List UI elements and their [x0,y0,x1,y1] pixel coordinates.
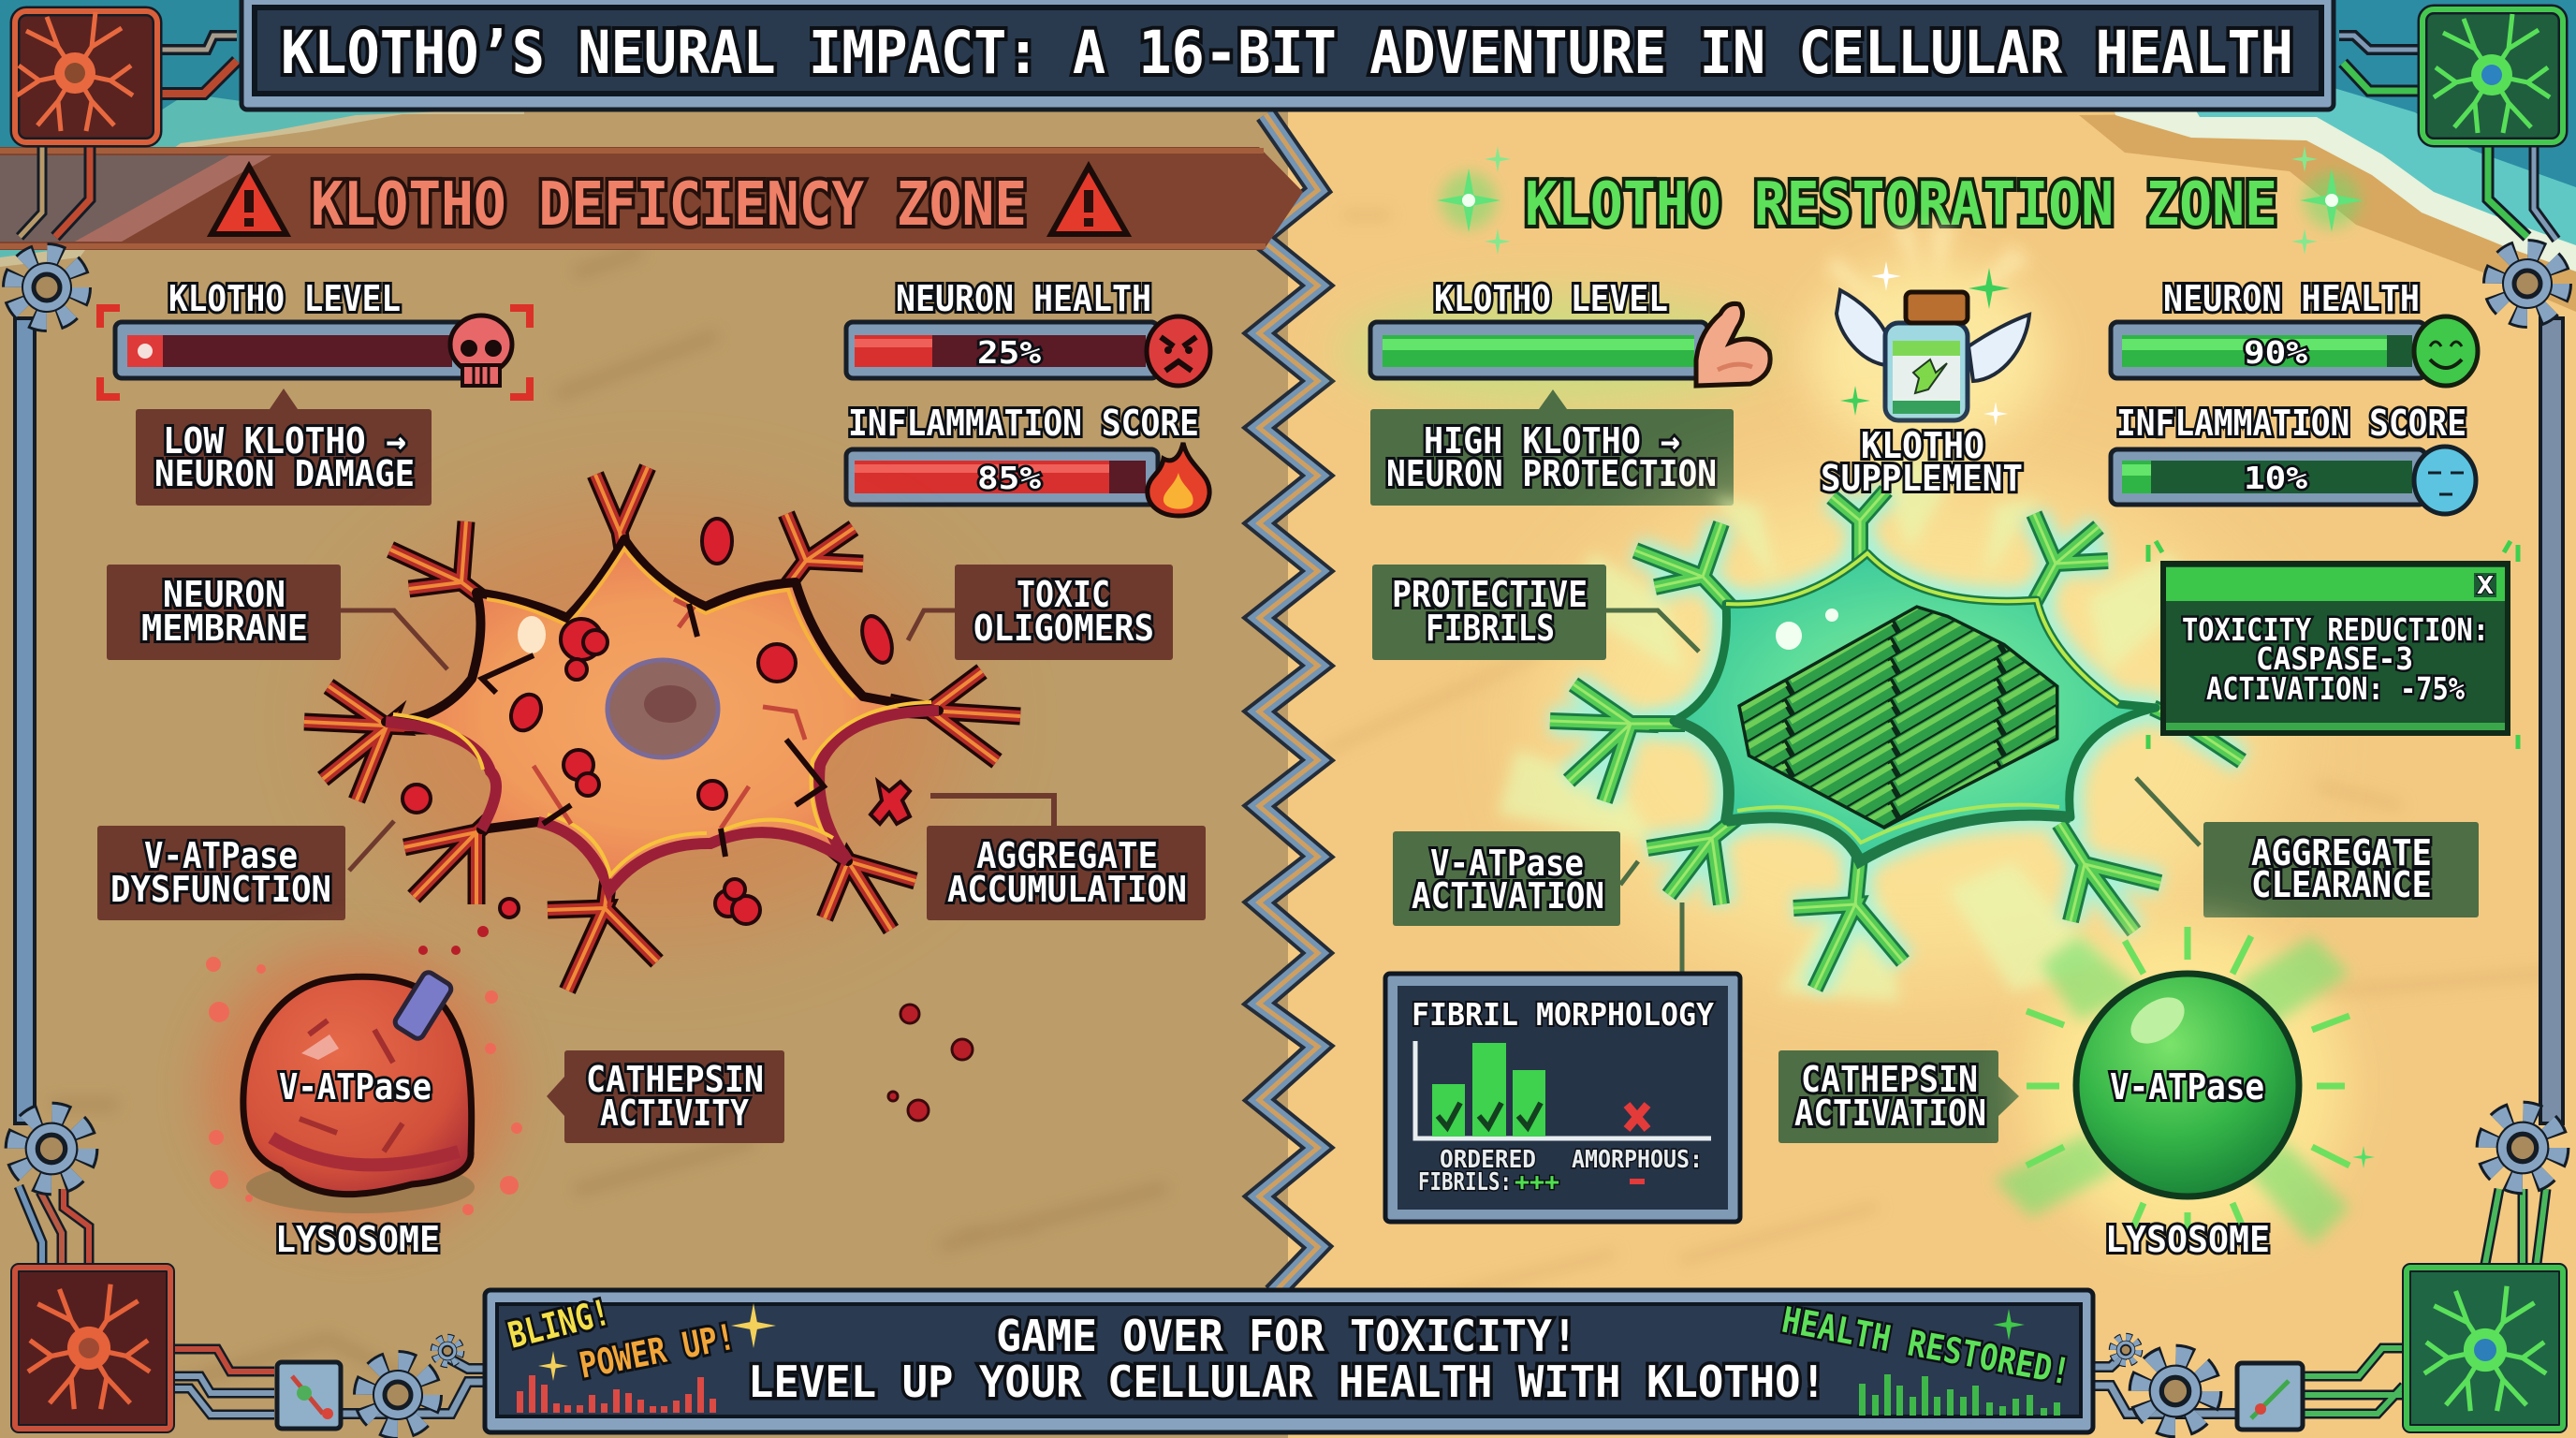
lysosome: healthy: V-ATPase [2110,1066,2264,1108]
label: lysosome left: LYSOSOME [275,1219,440,1260]
label: aggregate clearance: AGGREGATE [2251,832,2432,873]
icon: angry face [1147,316,1210,386]
panel: fibril morphology: ORDERED [1440,1146,1536,1174]
callout: low klotho: LOW KLOTHO → [163,420,406,462]
callout: toxicity reduction: ACTIVATION: -75% [2206,670,2465,707]
title bar [242,0,2334,110]
label: v-atpase activation: V-ATPase [1430,843,1584,884]
sparkles [538,1303,776,1381]
stat: left inflammation score [846,403,1209,516]
banner line 2: LEVEL UP YOUR CELLULAR HEALTH WITH KLOTHO! [748,1357,1826,1407]
label: cathepsin activity [547,1050,784,1143]
neuron: damaged [304,467,1020,990]
label: v-atpase dysfunction [97,821,394,920]
label: v-atpase dysfunction: V-ATPase [144,835,298,876]
v-atpase cylinder [393,970,453,1041]
stat: right neuron health [2111,278,2478,386]
label: aggregate accumulation: ACCUMULATION [947,869,1187,910]
background: right sand [1288,0,2576,1438]
label: cathepsin activation: CATHEPSIN [1801,1059,1978,1100]
title text: KLOTHO’S NEURAL IMPACT: A 16-BIT ADVENTURE IN CELLULAR HEALTH [281,19,2293,87]
callout: toxicity reduction [2148,541,2518,749]
red aggregates [402,519,910,924]
stat: right inflammation score [2111,403,2476,514]
effect text: health restored: HEALTH RESTORED! [1778,1299,2073,1393]
panel: fibril morphology: FIBRIL MORPHOLOGY [1412,996,1714,1033]
label: neuron membrane: NEURON [163,574,285,615]
wings [1837,290,1888,365]
background: ocean top left [0,0,524,267]
label: lysosome right: LYSOSOME [2105,1219,2270,1260]
callout: high klotho: NEURON PROTECTION [1386,453,1717,494]
icon: gear mid left [16,1113,87,1184]
panel: fibril morphology: +++ [1515,1168,1559,1196]
chart: green equalizer [1859,1374,2060,1416]
label: v-atpase activation: ACTIVATION [1412,875,1604,917]
nucleus [607,660,718,757]
lysosome: damaged [203,926,522,1236]
stat: right klotho level [1339,278,1770,407]
stat: left klotho level: KLOTHO LEVEL [168,278,401,319]
callout: high klotho: HIGH KLOTHO → [1424,420,1680,462]
stat: right neuron health: NEURON HEALTH [2163,278,2420,319]
label: klotho supplement: KLOTHO [1861,425,1984,466]
banner line 1: GAME OVER FOR TOXICITY! [996,1311,1577,1361]
stat: right neuron health: 90% [2244,334,2307,371]
lysosome: healthy [1994,926,2375,1245]
icon: muscle arm [1696,303,1770,386]
stat: left klotho level [100,278,530,397]
stat: right inflammation score: INFLAMMATION SCORE [2116,403,2466,444]
stat: left inflammation score: INFLAMMATION SCORE [848,403,1199,444]
label: aggregate clearance: CLEARANCE [2251,864,2432,905]
label: aggregate accumulation [927,796,1206,920]
icon: warning triangle left [212,167,286,234]
label: cathepsin activation: ACTIVATION [1794,1093,1986,1134]
scattered aggregates [888,1005,973,1121]
effect text: power up: POWER UP! [576,1316,739,1387]
neuron: healthy [1550,491,2242,989]
panel: fibril morphology [1385,902,1740,1222]
callout: high klotho [1370,389,1734,506]
stat: left neuron health: NEURON HEALTH [896,278,1151,319]
icon: warning triangle right [1051,167,1127,234]
icon: gear top left [13,254,80,321]
frame: left rail [15,318,35,1123]
label: aggregate accumulation: AGGREGATE [976,835,1158,876]
background: ocean top right [2079,0,2576,312]
corner panel: top right neuron [2339,9,2563,240]
lysosome: damaged: V-ATPase [279,1066,432,1108]
divider: zigzag [1259,114,1318,1294]
frame: right rail [2540,318,2563,1123]
icon: calm face [2414,447,2476,514]
icon: gear top right [2494,250,2561,317]
label: v-atpase dysfunction: DYSFUNCTION [110,869,331,910]
label: cathepsin activity: ACTIVITY [600,1093,749,1134]
glow: green neuron [1498,459,2275,1002]
callout: low klotho: NEURON DAMAGE [154,453,415,494]
icon: flame [1148,443,1209,516]
corner panel: bottom left neuron [15,1186,274,1429]
label: cathepsin activity: CATHEPSIN [586,1059,764,1100]
callout: low klotho [136,389,432,506]
label: toxic oligomers: OLIGOMERS [973,608,1154,649]
effect text: bling: BLING! [505,1291,614,1357]
label: toxic oligomers [908,565,1173,660]
icon: gear mid right [2487,1112,2558,1183]
icon: happy face [2414,316,2478,386]
stat: right inflammation score: 10% [2244,460,2307,496]
stat: right klotho level: KLOTHO LEVEL [1434,278,1668,319]
klotho supplement bottle [1807,225,2050,449]
callout: toxicity reduction: CASPASE-3 [2256,640,2413,677]
chart: red equalizer [517,1375,716,1413]
heading: deficiency zone: KLOTHO DEFICIENCY ZONE [311,170,1027,240]
heading: restoration zone: KLOTHO RESTORATION ZONE [1525,170,2277,240]
label: protective fibrils [1372,565,1699,660]
label: neuron membrane [107,565,447,669]
bottom banner [485,1290,2093,1432]
label: aggregate clearance [2136,778,2479,917]
label: protective fibrils: PROTECTIVE [1392,574,1588,615]
stat: left inflammation score: 85% [977,460,1041,496]
stat: left neuron health: 25% [977,334,1041,371]
label: toxic oligomers: TOXIC [1017,574,1110,615]
protective fibril bundle [1737,605,2059,829]
label: protective fibrils: FIBRILS [1426,608,1555,649]
sand texture streaks [56,215,2546,1404]
stat: left neuron health [846,278,1210,386]
label: klotho supplement [1821,425,2023,499]
bottom right machinery [2093,1337,2303,1430]
banner: deficiency zone [0,147,1303,250]
corner panel: top left neuron [15,11,237,237]
glow: red neuron [346,506,964,936]
corner panel: bottom right neuron [2303,1189,2563,1429]
heading: restoration zone [1437,146,2364,255]
panel: fibril morphology: FIBRILS: [1418,1168,1512,1196]
panel: fibril morphology: AMORPHOUS: [1572,1146,1703,1174]
label: cathepsin activation [1778,1050,2019,1143]
bar chart [1415,1041,1711,1138]
callout: toxicity reduction: TOXICITY REDUCTION: [2182,611,2489,648]
bottom left machinery [277,1338,485,1429]
icon: skull [450,315,512,386]
label: klotho supplement: SUPPLEMENT [1821,458,2023,499]
label: neuron membrane: MEMBRANE [141,608,308,649]
label: v-atpase activation [1393,831,1638,926]
callout: toxicity reduction: X [2477,572,2494,600]
background: left sand [0,0,1292,1438]
